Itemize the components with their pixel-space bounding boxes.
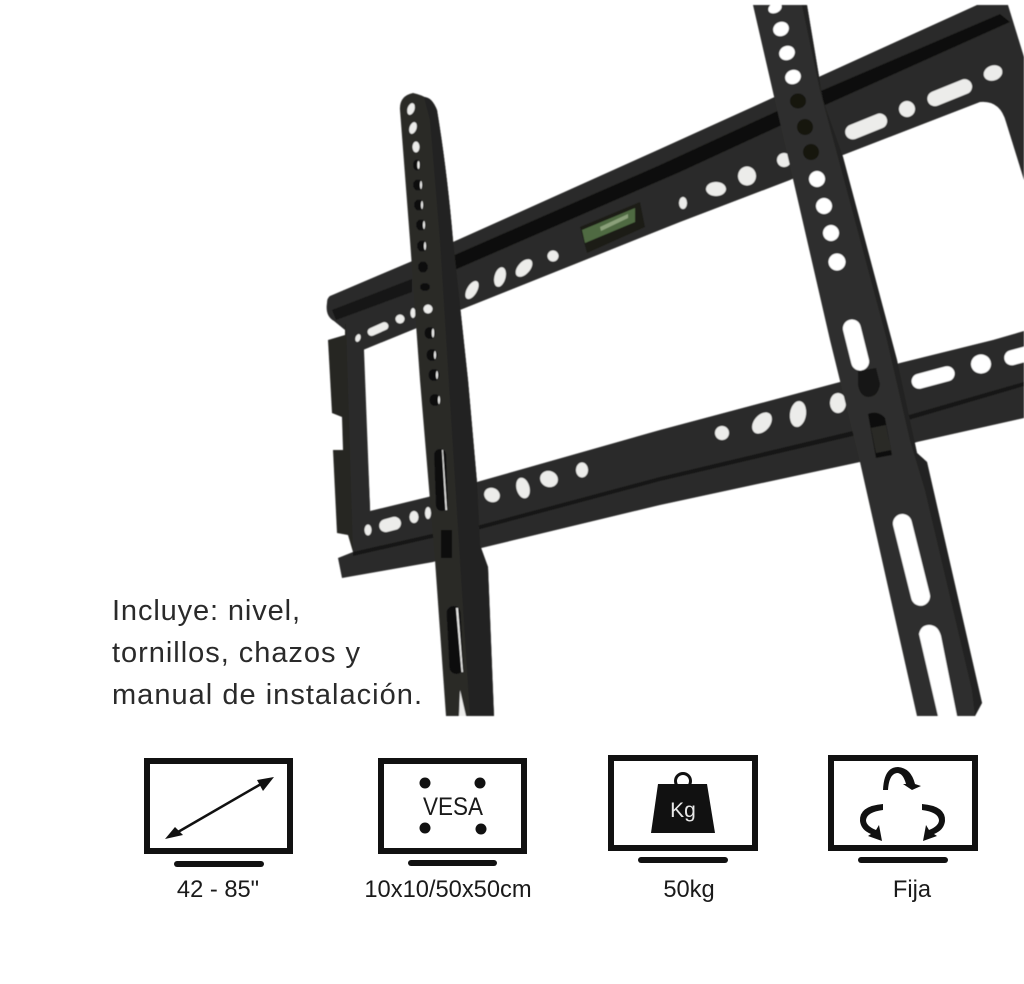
icon: monitor with weight: Kg [670, 799, 696, 822]
spirit level [580, 202, 645, 253]
label: Fija [893, 877, 932, 903]
label: 50kg [663, 877, 715, 903]
icon: monitor with diagonal arrow [147, 761, 290, 867]
horizontal lower rail [338, 331, 1024, 578]
icon: monitor with VESA holes [381, 761, 524, 866]
spec: fixed mount [831, 758, 975, 903]
includes text: manual de instalación. [112, 679, 422, 711]
icon: monitor with weight [611, 758, 755, 863]
right vertical arm [753, 1, 982, 716]
includes text: tornillos, chazos y [112, 637, 360, 669]
includes text: Incluye: nivel, [112, 595, 300, 627]
left arm holes [406, 102, 466, 716]
left vertical arm [400, 93, 494, 716]
spec: weight capacity [611, 758, 755, 903]
label: 10x10/50x50cm [364, 877, 532, 903]
rail holes [354, 63, 1004, 535]
left frame face [346, 322, 372, 552]
icon: monitor with rotation arrows [831, 758, 975, 863]
spec: screen size [147, 761, 290, 903]
horizontal upper rail [327, 5, 1024, 350]
includes text [112, 595, 422, 711]
left frame column [328, 323, 370, 552]
label: 42 - 85" [177, 877, 259, 903]
wall mount bracket photo [327, 1, 1024, 716]
spec: VESA pattern [364, 761, 532, 903]
icon: monitor with VESA holes: VESA [423, 793, 483, 821]
right arm holes [767, 1, 957, 716]
